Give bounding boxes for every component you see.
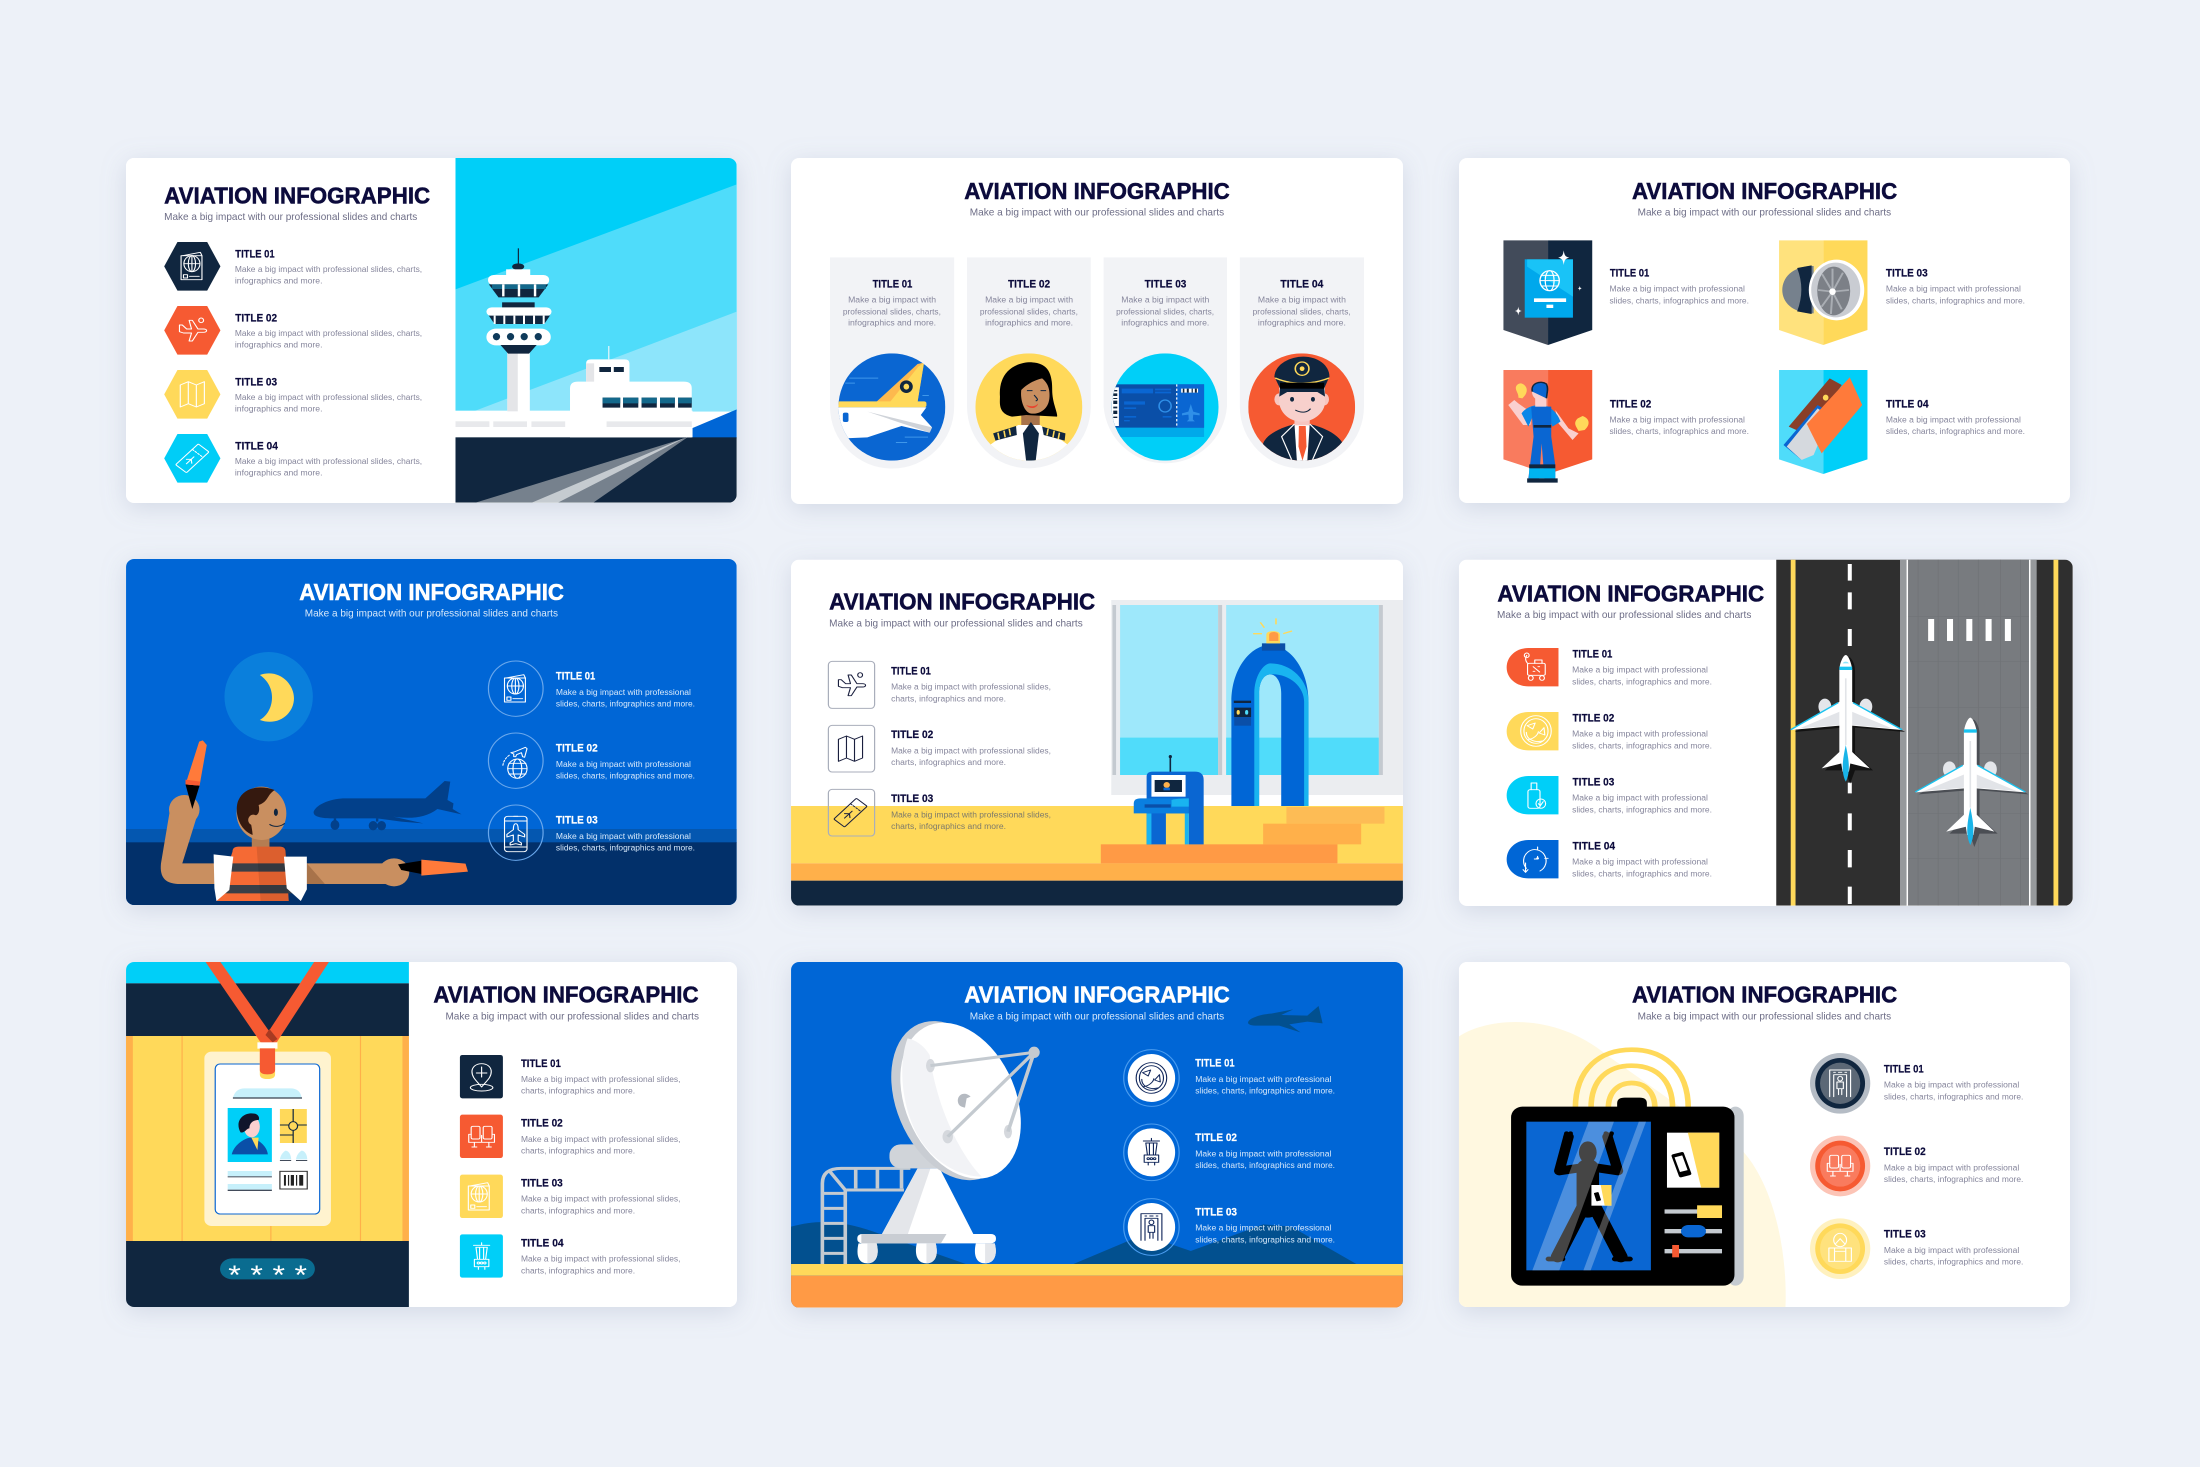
card 01 plane tail: [830, 257, 954, 469]
illustration: marshaller: [161, 740, 468, 901]
hexagon item 02: infographics and more.: [235, 340, 323, 349]
title: AVIATION INFOGRAPHIC: [299, 580, 564, 605]
item 02: [1124, 1124, 1335, 1181]
item 01: TITLE 01: [891, 664, 931, 677]
text 01: [1610, 267, 1749, 305]
item 01: slides, charts, infographics and more.: [1195, 1086, 1335, 1095]
item 04: TITLE 04: [521, 1237, 564, 1249]
card 04 male captain: Make a big impact with: [1258, 295, 1346, 304]
item 02: TITLE 02: [891, 728, 933, 741]
title: AVIATION INFOGRAPHIC: [1497, 581, 1764, 607]
item 03: slides, charts, infographics and more.: [1572, 805, 1712, 814]
item 03: Make a big impact with professional slides,: [521, 1194, 680, 1203]
title: AVIATION INFOGRAPHIC: [829, 590, 1095, 615]
illustration: plane silhouette: [1248, 1006, 1323, 1032]
text 01: TITLE 01: [1610, 267, 1649, 279]
hexagon item 04: TITLE 04: [235, 439, 278, 452]
item 03: TITLE 03: [891, 792, 933, 805]
text 02: TITLE 02: [1610, 397, 1651, 410]
subtitle: Make a big impact with our professional slides and charts: [1638, 208, 1891, 218]
title: AVIATION INFOGRAPHIC: [1632, 983, 1897, 1008]
item 03: Make a big impact with professional slides,: [891, 810, 1051, 819]
item 02: TITLE 02: [1195, 1131, 1237, 1144]
item 02: Make a big impact with professional: [556, 760, 691, 769]
illustration: wall background: [126, 962, 409, 1307]
item 01: slides, charts, infographics and more.: [1572, 677, 1712, 686]
item 02: TITLE 02: [521, 1117, 563, 1129]
item 03: charts, infographics and more.: [891, 822, 1006, 831]
card 01 plane tail: TITLE 01: [873, 277, 913, 290]
item 01: TITLE 01: [521, 1057, 561, 1070]
item 01: Make a big impact with professional: [556, 688, 691, 697]
item 03: [488, 805, 695, 860]
illustration: runway top view: [1776, 560, 2073, 906]
item 03: [1124, 1199, 1335, 1255]
card 01 plane tail: Make a big impact with: [848, 295, 936, 304]
item 01: [828, 661, 1051, 708]
item 04: [460, 1234, 680, 1278]
hexagon item 01: TITLE 01: [235, 247, 275, 260]
password pill: ****: [228, 1261, 308, 1290]
card 04 male captain: infographics and more.: [1258, 318, 1346, 327]
subtitle: Make a big impact with our professional slides and charts: [829, 618, 1083, 629]
background blob: [1459, 1022, 1786, 1307]
item 01: slides, charts, infographics and more.: [556, 699, 695, 708]
item 02: [1810, 1136, 2023, 1196]
item 03: slides, charts, infographics and more.: [1195, 1235, 1335, 1244]
item 01: [460, 1055, 680, 1098]
hexagon item 01: Make a big impact with professional slides, charts,: [235, 265, 422, 274]
text 04: TITLE 04: [1886, 397, 1929, 410]
item 01: Make a big impact with professional: [1195, 1075, 1331, 1084]
card 02 woman pilot: Make a big impact with: [985, 295, 1073, 304]
item 03: Make a big impact with professional: [1572, 793, 1708, 802]
title: AVIATION INFOGRAPHIC: [433, 983, 699, 1008]
illustration: airport tower and terminal: [455, 158, 737, 503]
item 03: Make a big impact with professional: [1195, 1223, 1331, 1232]
panel: slide 8 radar dish: [791, 962, 1403, 1308]
item 03: Make a big impact with professional: [1884, 1246, 2019, 1255]
text 04: Make a big impact with professional: [1886, 415, 2021, 424]
item 03: TITLE 03: [1573, 776, 1615, 788]
card 03 boarding pass: professional slides, charts,: [1116, 307, 1214, 316]
password pill: [220, 1258, 315, 1280]
subtitle: Make a big impact with our professional slides and charts: [970, 1012, 1224, 1022]
illustration: plane 2: [1915, 718, 2029, 847]
item 01: charts, infographics and more.: [891, 694, 1006, 703]
item 01: TITLE 01: [1195, 1057, 1235, 1069]
illustration: plane 1: [1791, 655, 1905, 784]
item 02: charts, infographics and more.: [891, 758, 1006, 767]
item 01: Make a big impact with professional slides,: [891, 682, 1051, 691]
item 01: Make a big impact with professional: [1572, 665, 1708, 674]
text 03: TITLE 03: [1886, 267, 1928, 279]
hexagon item 02: [164, 306, 422, 355]
badge 02 ground crew: [1503, 370, 1592, 483]
item 03: [828, 789, 1051, 836]
panel: slide 9 body scanner: [1459, 962, 2070, 1307]
illustration: terminal window and floor: [791, 600, 1403, 906]
illustration: ID badge on lanyard: [204, 962, 331, 1226]
panel: slide 1 control tower: [126, 158, 737, 503]
illustration: scanner kiosk: [1134, 755, 1204, 844]
item 01: [1810, 1053, 2023, 1114]
hexagon item 03: Make a big impact with professional slides, charts,: [235, 393, 422, 402]
card 03 boarding pass: [1104, 257, 1227, 463]
item 02: Make a big impact with professional slides,: [891, 746, 1051, 755]
hexagon item 02: TITLE 02: [235, 311, 277, 324]
item 02: slides, charts, infographics and more.: [1884, 1175, 2023, 1184]
item 04: Make a big impact with professional: [1572, 857, 1708, 866]
item 02: [460, 1115, 680, 1158]
title: AVIATION INFOGRAPHIC: [164, 183, 430, 209]
hexagon item 04: Make a big impact with professional slides, charts,: [235, 457, 422, 466]
text 03: Make a big impact with professional: [1886, 284, 2021, 293]
panel: slide 4 marshaller at night: [126, 559, 737, 905]
item 01: [1124, 1050, 1335, 1106]
item 03: [1507, 776, 1712, 814]
text 01: slides, charts, infographics and more.: [1610, 296, 1749, 305]
badge 03 jet engine: [1779, 240, 1867, 345]
item 02: slides, charts, infographics and more.: [1195, 1161, 1335, 1170]
card 03 boarding pass: infographics and more.: [1121, 318, 1209, 327]
item 01: Make a big impact with professional slides,: [521, 1075, 680, 1084]
item 01: [488, 661, 695, 716]
item 02: Make a big impact with professional: [1884, 1163, 2019, 1172]
illustration: metal detector arch: [1231, 618, 1309, 806]
item 02: [1507, 712, 1712, 750]
illustration: satellite dish: [822, 1009, 1041, 1264]
hexagon item 02: Make a big impact with professional slides, charts,: [235, 329, 422, 338]
item 03: TITLE 03: [1195, 1205, 1237, 1218]
card 02 woman pilot: [967, 257, 1091, 468]
subtitle: Make a big impact with our professional slides and charts: [1638, 1012, 1891, 1022]
hexagon item 03: infographics and more.: [235, 404, 323, 413]
item 02: TITLE 02: [1573, 712, 1615, 724]
text 04: slides, charts, infographics and more.: [1886, 427, 2025, 436]
item 03: slides, charts, infographics and more.: [1884, 1257, 2023, 1266]
subtitle: Make a big impact with our professional slides and charts: [164, 212, 417, 223]
hexagon item 01: [164, 242, 422, 291]
item 03: slides, charts, infographics and more.: [556, 843, 695, 852]
item 02: Make a big impact with professional: [1195, 1149, 1331, 1158]
item 03: [1810, 1218, 2023, 1279]
item 01: slides, charts, infographics and more.: [1884, 1092, 2023, 1101]
subtitle: Make a big impact with our professional slides and charts: [970, 208, 1224, 218]
illustration: signal arcs: [1575, 1050, 1688, 1108]
item 02: TITLE 02: [1884, 1145, 1926, 1158]
text 03: slides, charts, infographics and more.: [1886, 296, 2025, 305]
card 02 woman pilot: professional slides, charts,: [980, 307, 1078, 316]
subtitle: Make a big impact with our professional slides and charts: [1497, 610, 1751, 621]
text 03: [1886, 267, 2025, 305]
hexagon item 03: [164, 370, 422, 419]
subtitle: Make a big impact with our professional slides and charts: [445, 1012, 699, 1022]
illustration: ground stripes: [791, 1264, 1403, 1308]
item 01: TITLE 01: [1573, 648, 1612, 660]
item 01: [1507, 648, 1712, 686]
item 02: [488, 733, 695, 788]
text 02: Make a big impact with professional: [1610, 415, 1745, 424]
card 03 boarding pass: Make a big impact with: [1121, 295, 1209, 304]
item 04: charts, infographics and more.: [521, 1266, 635, 1275]
item 01: charts, infographics and more.: [521, 1086, 635, 1095]
item 01: Make a big impact with professional: [1884, 1080, 2019, 1089]
text 02: slides, charts, infographics and more.: [1610, 427, 1749, 436]
hexagon item 01: infographics and more.: [235, 276, 323, 285]
hexagon item 04: [164, 434, 422, 483]
text 01: Make a big impact with professional: [1610, 284, 1745, 293]
panel: slide 2 four cards: [830, 179, 1364, 469]
title: AVIATION INFOGRAPHIC: [964, 179, 1230, 204]
item 01: TITLE 01: [556, 669, 595, 682]
item 02: TITLE 02: [556, 741, 598, 754]
item 04: Make a big impact with professional slides,: [521, 1254, 680, 1263]
card 04 male captain: TITLE 04: [1280, 277, 1324, 290]
item 02: Make a big impact with professional: [1572, 729, 1708, 738]
item 02: slides, charts, infographics and more.: [556, 771, 695, 780]
item 04: slides, charts, infographics and more.: [1572, 869, 1712, 878]
panel: slide 5 security gate: [791, 560, 1403, 906]
item 02: slides, charts, infographics and more.: [1572, 741, 1712, 750]
card 04 male captain: professional slides, charts,: [1253, 307, 1351, 316]
title: AVIATION INFOGRAPHIC: [1632, 179, 1897, 204]
card 03 boarding pass: TITLE 03: [1145, 277, 1187, 290]
text 02: [1610, 397, 1749, 436]
card 01 plane tail: infographics and more.: [848, 318, 936, 327]
panel: slide 7 ID badge: [126, 962, 737, 1307]
illustration: hills: [791, 1222, 1356, 1264]
item 01: TITLE 01: [1884, 1062, 1924, 1075]
badge 01 passport: [1503, 240, 1592, 345]
title: AVIATION INFOGRAPHIC: [964, 983, 1230, 1008]
item 03: charts, infographics and more.: [521, 1206, 635, 1215]
hexagon item 03: TITLE 03: [235, 375, 277, 388]
panel: slide 6 runway: [1459, 560, 2073, 906]
item 02: charts, infographics and more.: [521, 1146, 635, 1155]
card 02 woman pilot: infographics and more.: [985, 318, 1073, 327]
item 02: Make a big impact with professional slides,: [521, 1135, 680, 1144]
badge 04 wallet and ticket: [1779, 370, 1867, 474]
item 04: TITLE 04: [1573, 840, 1615, 852]
subtitle: Make a big impact with our professional slides and charts: [305, 609, 558, 619]
panel shadows and slide backings: [126, 158, 2073, 1308]
item 03: [460, 1175, 680, 1218]
item 03: TITLE 03: [521, 1177, 563, 1189]
item 04: [1507, 840, 1712, 878]
illustration: plane silhouette: [314, 781, 462, 830]
item 02: [828, 725, 1051, 772]
item 03: Make a big impact with professional: [556, 832, 691, 841]
card 02 woman pilot: TITLE 02: [1008, 277, 1050, 290]
item 03: TITLE 03: [556, 813, 598, 826]
icon: moon: [224, 652, 313, 741]
text 04: [1886, 397, 2025, 436]
card 01 plane tail: professional slides, charts,: [843, 307, 941, 316]
panel: slide 3 badge grid: [1503, 179, 2025, 483]
illustration: scanner screen: [1511, 1098, 1744, 1286]
item 03: TITLE 03: [1884, 1228, 1926, 1240]
card 04 male captain: [1240, 257, 1364, 469]
hexagon item 04: infographics and more.: [235, 468, 323, 477]
